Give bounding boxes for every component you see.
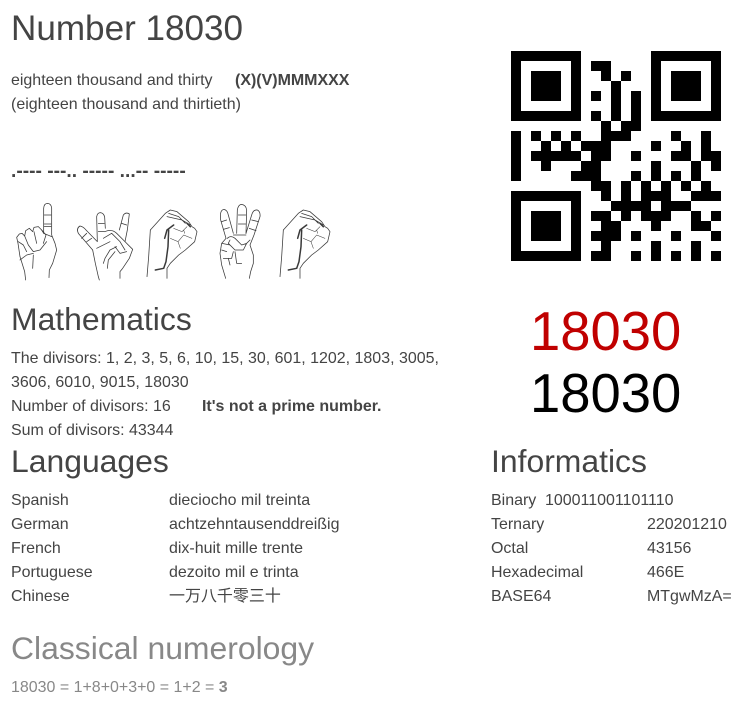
binary value: 100011001101110 <box>545 492 673 509</box>
base names: Hexadecimal <box>491 564 583 581</box>
base names <box>491 516 583 605</box>
base names: BASE64 <box>491 588 551 605</box>
icon: hand sign 0 <box>147 210 197 278</box>
language names: French <box>11 540 61 557</box>
sum of divisors: Sum of divisors: 43344 <box>11 422 173 439</box>
base values: 220201210 <box>647 516 727 533</box>
heading: classical numerology: Classical numerology <box>11 630 314 666</box>
icon: hand sign 3 <box>220 204 260 278</box>
icon: hand sign 1 <box>17 203 57 280</box>
divisors list: The divisors: 1, 2, 3, 5, 6, 10, 15, 30, 601, 1202, 1803, 3005, <box>11 350 439 367</box>
base values <box>647 516 732 605</box>
icon: hand sign 8 <box>77 213 133 280</box>
language translations: 一万八千零三十 <box>169 588 281 605</box>
number of divisors: Number of divisors: 16 <box>11 398 171 415</box>
prime status: It's not a prime number. <box>202 398 381 415</box>
heading: mathematics: Mathematics <box>11 301 192 337</box>
black number: 18030 <box>530 363 681 424</box>
language names <box>11 492 93 605</box>
language names: German <box>11 516 69 533</box>
ordinal in words: (eighteen thousand and thirtieth) <box>11 96 241 113</box>
base values: MTgwMzA= <box>647 588 732 605</box>
roman numeral: (X)(V)MMMXXX <box>235 72 349 89</box>
language names: Portuguese <box>11 564 93 581</box>
binary row: Binary <box>491 492 536 509</box>
number in words: eighteen thousand and thirty <box>11 72 213 89</box>
base names: Octal <box>491 540 528 557</box>
language translations: dezoito mil e trinta <box>169 564 299 581</box>
divisors list: 3606, 6010, 9015, 18030 <box>11 374 189 391</box>
language names: Chinese <box>11 588 70 605</box>
heading: languages: Languages <box>11 443 169 479</box>
language translations: dix-huit mille trente <box>169 540 303 557</box>
morse code: .---- ---.. ----- ...-- ----- <box>11 161 186 182</box>
base values: 466E <box>647 564 684 581</box>
heading: informatics: Informatics <box>491 443 647 479</box>
sign language hands <box>16 203 330 280</box>
numerology calculation: 18030 = 1+8+0+3+0 = 1+2 = 3 <box>11 679 228 696</box>
divisors list <box>11 350 439 391</box>
language translations: dieciocho mil treinta <box>169 492 310 509</box>
title: Number 18030 <box>11 9 243 48</box>
language translations: achtzehntausenddreißig <box>169 516 339 533</box>
icon: hand sign 0 second <box>280 210 330 278</box>
red number: 18030 <box>530 301 681 362</box>
base names: Ternary <box>491 516 544 533</box>
language names: Spanish <box>11 492 69 509</box>
base values: 43156 <box>647 540 691 557</box>
QR code <box>511 51 721 261</box>
language translations <box>169 492 339 605</box>
